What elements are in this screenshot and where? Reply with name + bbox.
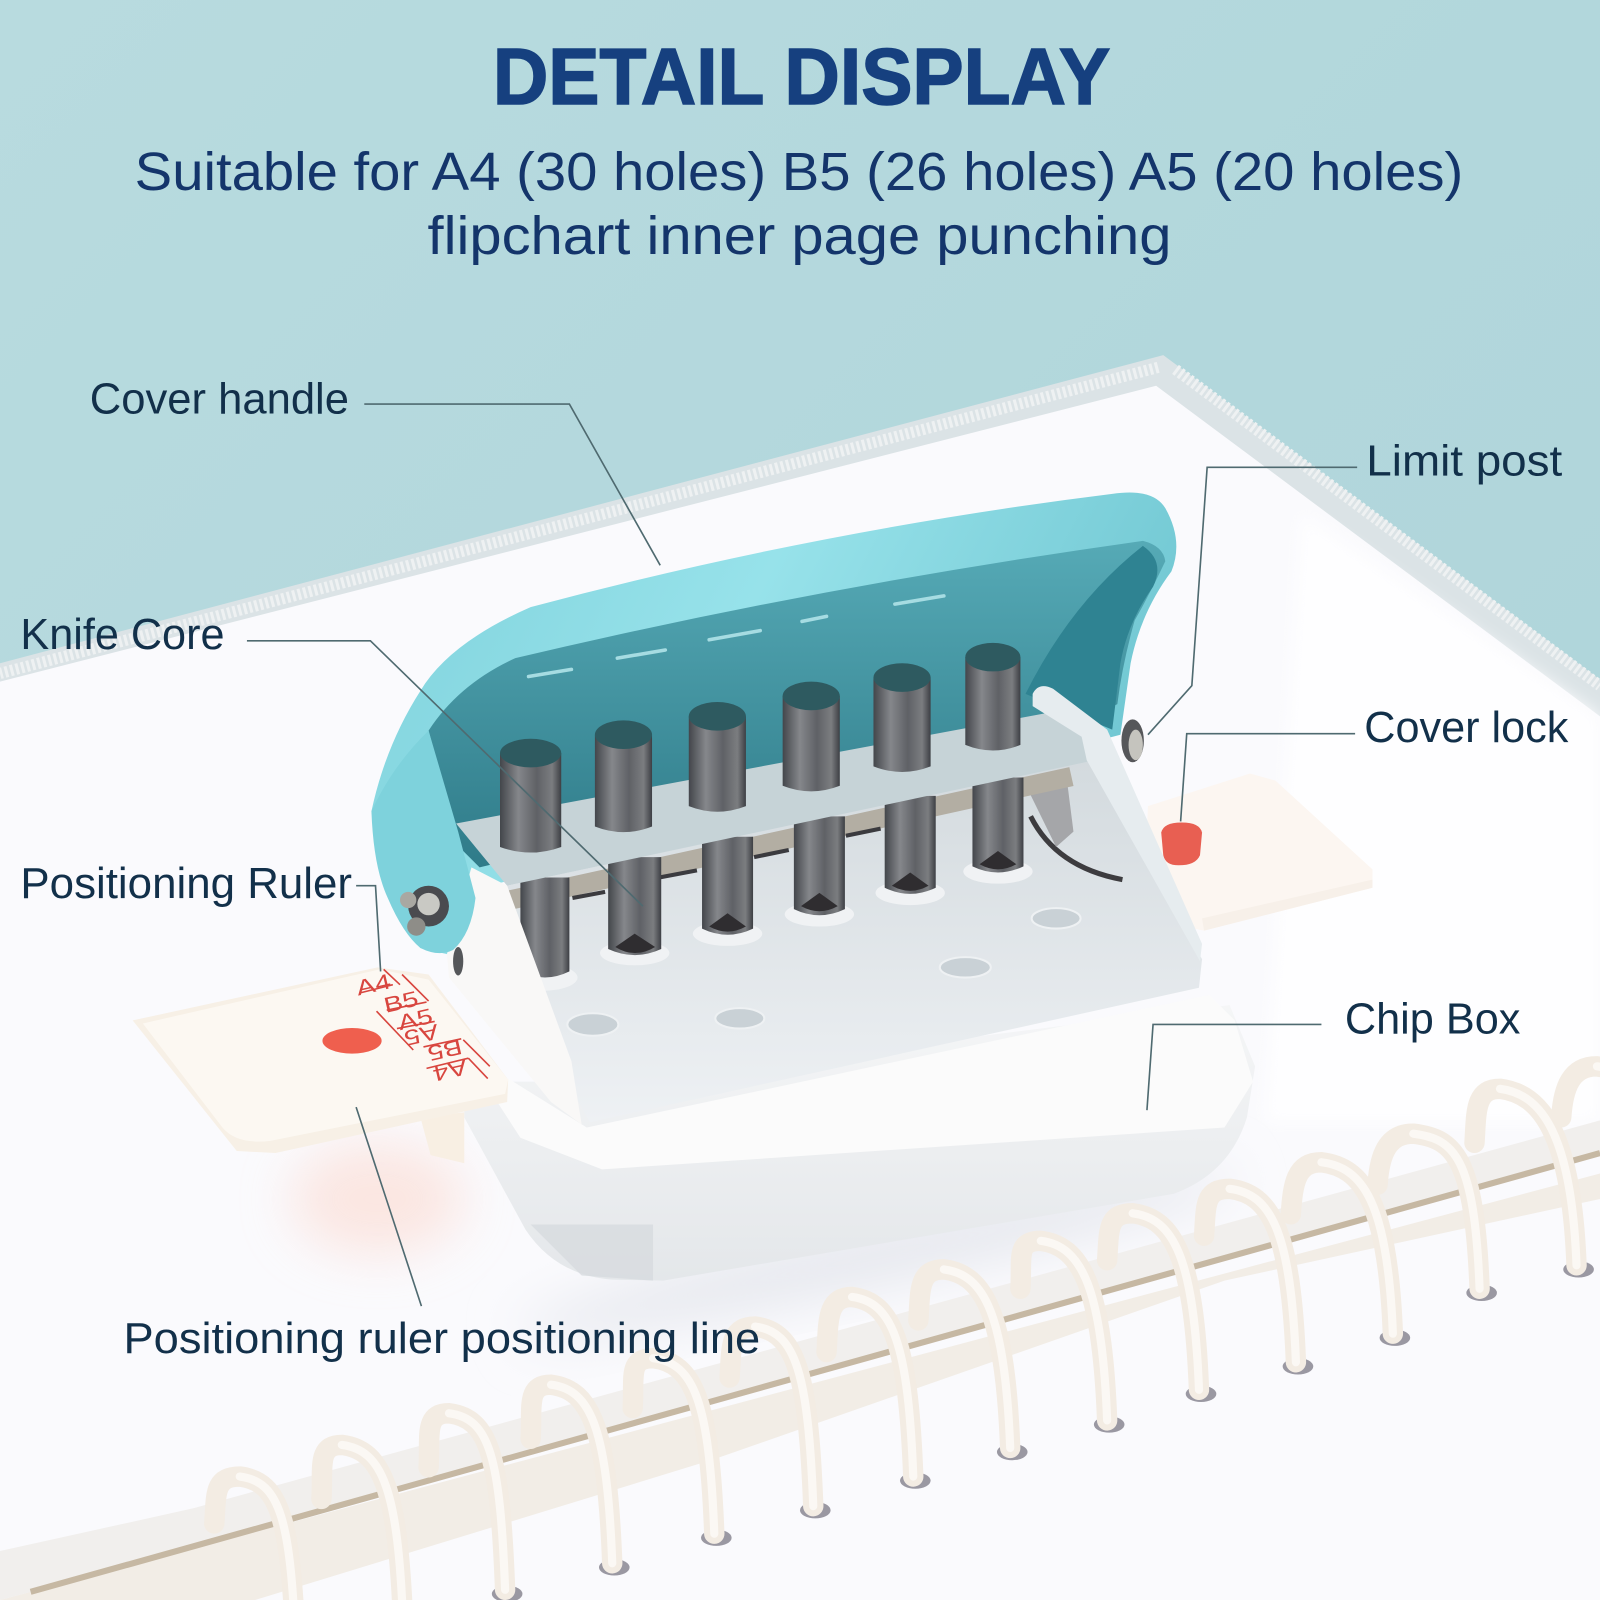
- lever clip: [1029, 776, 1073, 847]
- label: cover handle: [90, 374, 660, 565]
- ruler size marks: A5: [402, 1019, 441, 1050]
- ruler size marks: A4: [354, 969, 393, 1000]
- title: DETAIL DISPLAY: [493, 32, 1110, 121]
- label: limit post: Limit post: [1366, 437, 1562, 486]
- cover glare marks: [529, 596, 944, 677]
- left ruler support: [420, 1112, 464, 1163]
- spiral coils: [214, 1066, 1600, 1600]
- cover inner side fold: [1026, 546, 1157, 730]
- punch shadow: [512, 1149, 1243, 1361]
- ruler size marks: [354, 969, 490, 1086]
- punch right side wall: [1033, 686, 1202, 961]
- label: cover lock: Cover lock: [1364, 703, 1568, 752]
- punch base plate: [507, 760, 1202, 1122]
- chip box: [464, 995, 1255, 1281]
- ruler shadow: [291, 1143, 464, 1255]
- label: positioning ruler: [20, 859, 381, 971]
- axle rod: [510, 777, 1071, 900]
- label: cover handle: Cover handle: [90, 374, 349, 423]
- spiral binding strip: [0, 1120, 1600, 1600]
- label: cover lock: [1181, 703, 1568, 821]
- punch holes: [567, 908, 1081, 1036]
- ruler size marks: B5: [425, 1034, 464, 1065]
- left hinge bolt: [400, 886, 463, 976]
- left positioning ruler: [133, 967, 508, 1153]
- cover hinge tab: [371, 731, 476, 953]
- label: positioning ruler positioning line: [123, 1107, 760, 1363]
- subtitle: Suitable for A4 (30 holes) B5 (26 holes) A5 (20 holes): [135, 142, 1463, 202]
- pin guide plate: [456, 712, 1090, 886]
- ruler size marks: A5: [396, 1004, 435, 1035]
- label: knife core: Knife Core: [20, 610, 224, 659]
- right hinge washers: [1121, 719, 1144, 762]
- subtitle: [135, 142, 1463, 266]
- subtitle: flipchart inner page punching: [428, 206, 1171, 266]
- ruler size marks: A4: [430, 1055, 470, 1086]
- label: positioning ruler positioning line: Positioning ruler positioning line: [123, 1314, 760, 1363]
- label: positioning ruler: Positioning Ruler: [20, 859, 352, 908]
- binder sheet: [0, 355, 1600, 1600]
- label: chip box: [1147, 995, 1520, 1110]
- punch left side wall: [447, 867, 582, 1124]
- cover outer shell: [371, 492, 1176, 954]
- label: knife core: [20, 610, 643, 906]
- label: chip box: Chip Box: [1345, 995, 1520, 1044]
- label: limit post: [1148, 437, 1562, 735]
- cover inner shell: [429, 541, 1165, 867]
- lever spring: [1031, 816, 1122, 880]
- upper knife pins: [500, 643, 1020, 853]
- lower knife pins: [508, 778, 1033, 991]
- right positioning ruler with lock: [1143, 773, 1372, 931]
- coil foot holes: [492, 1261, 1594, 1600]
- chrome bars: [572, 829, 881, 898]
- coil highlights: [240, 1066, 1600, 1600]
- ruler size marks: B5: [381, 987, 421, 1018]
- ruler marker: [322, 1028, 382, 1054]
